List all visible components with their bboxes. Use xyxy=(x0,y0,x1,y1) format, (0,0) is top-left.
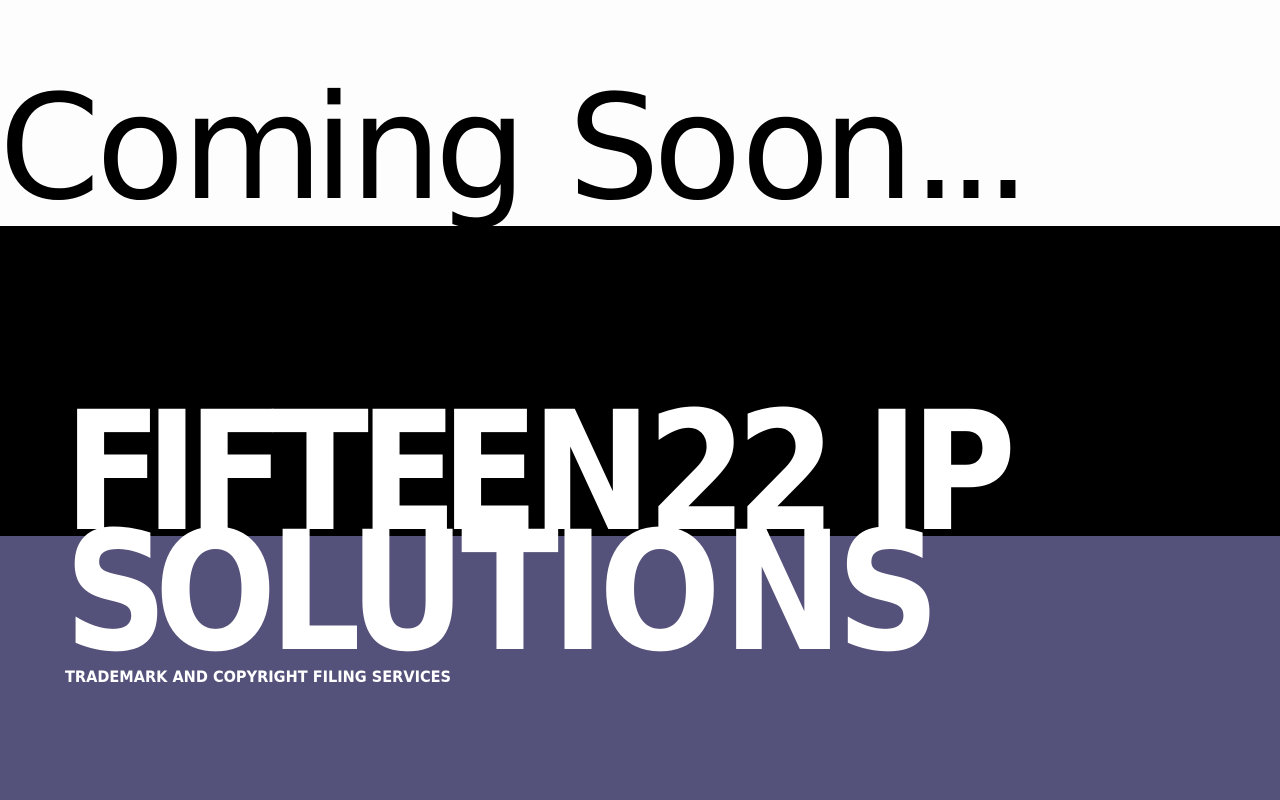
title: company name xyxy=(64,376,1016,688)
heading: coming soon: Coming Soon... xyxy=(0,64,1031,233)
panel: black band xyxy=(0,226,1280,536)
title: company name: FIFTEEN22 IP xyxy=(64,376,1016,568)
panel: white header background xyxy=(0,0,1280,226)
panel: purple band xyxy=(0,536,1280,800)
tagline: TRADEMARK AND COPYRIGHT FILING SERVICES xyxy=(65,667,451,686)
title: company name: SOLUTIONS xyxy=(64,496,940,688)
